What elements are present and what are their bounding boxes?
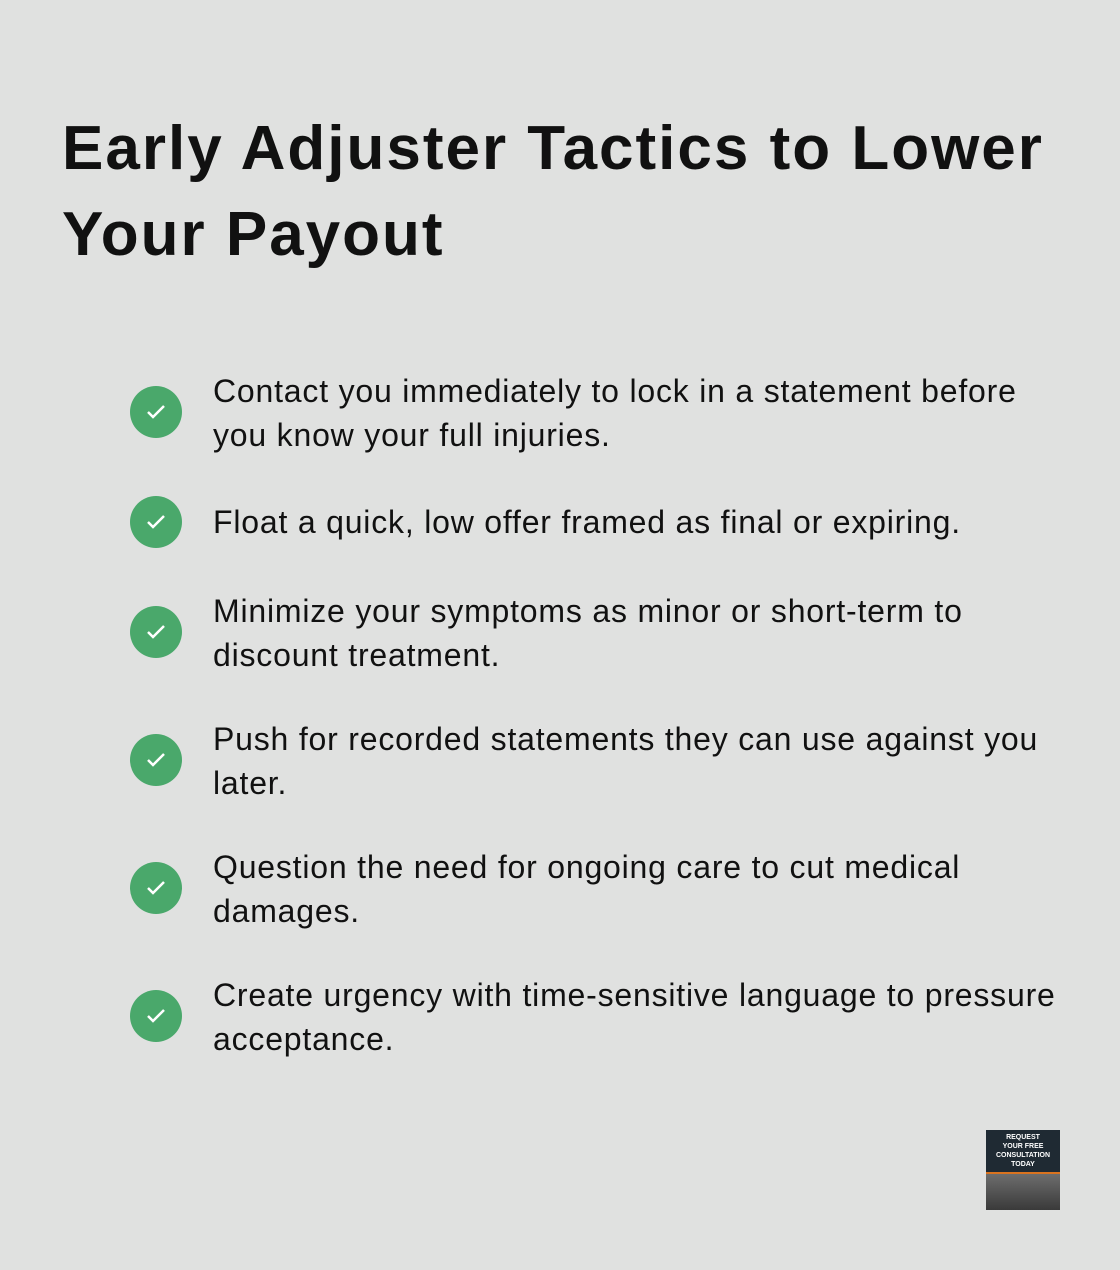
item 5 [130, 849, 960, 929]
text: you know your full injuries. [213, 417, 611, 453]
item 4 [130, 721, 1038, 801]
item 6 [130, 977, 1056, 1057]
item 3 [130, 593, 963, 673]
text: Push for recorded statements they can use against you [213, 721, 1038, 757]
text [213, 849, 960, 929]
text: Minimize your symptoms as minor or short-term to [213, 593, 963, 629]
logo badge: TODAY [1011, 1161, 1035, 1168]
text: Float a quick, low offer framed as final or expiring. [213, 504, 961, 540]
icon: check [130, 606, 182, 658]
text: discount treatment. [213, 637, 500, 673]
icon: check [130, 496, 182, 548]
logo badge: YOUR FREE [1003, 1143, 1043, 1150]
text [213, 593, 963, 673]
item 1 [130, 373, 1017, 453]
title: Your Payout [62, 200, 445, 269]
text [213, 977, 1056, 1057]
icon: check [130, 386, 182, 438]
logo badge [986, 1130, 1060, 1210]
logo badge: CONSULTATION [996, 1152, 1050, 1159]
text: Create urgency with time-sensitive language to pressure [213, 977, 1056, 1013]
title: Early Adjuster Tactics to Lower [62, 114, 1044, 183]
item 2 [130, 496, 961, 548]
text: Question the need for ongoing care to cut medical [213, 849, 960, 885]
icon: check [130, 862, 182, 914]
title [62, 114, 1044, 269]
text [213, 721, 1038, 801]
text: Contact you immediately to lock in a statement before [213, 373, 1017, 409]
logo badge: REQUEST [1006, 1134, 1040, 1141]
text: damages. [213, 893, 360, 929]
text: later. [213, 765, 287, 801]
icon: check [130, 990, 182, 1042]
text [213, 373, 1017, 453]
icon: check [130, 734, 182, 786]
text: acceptance. [213, 1021, 394, 1057]
